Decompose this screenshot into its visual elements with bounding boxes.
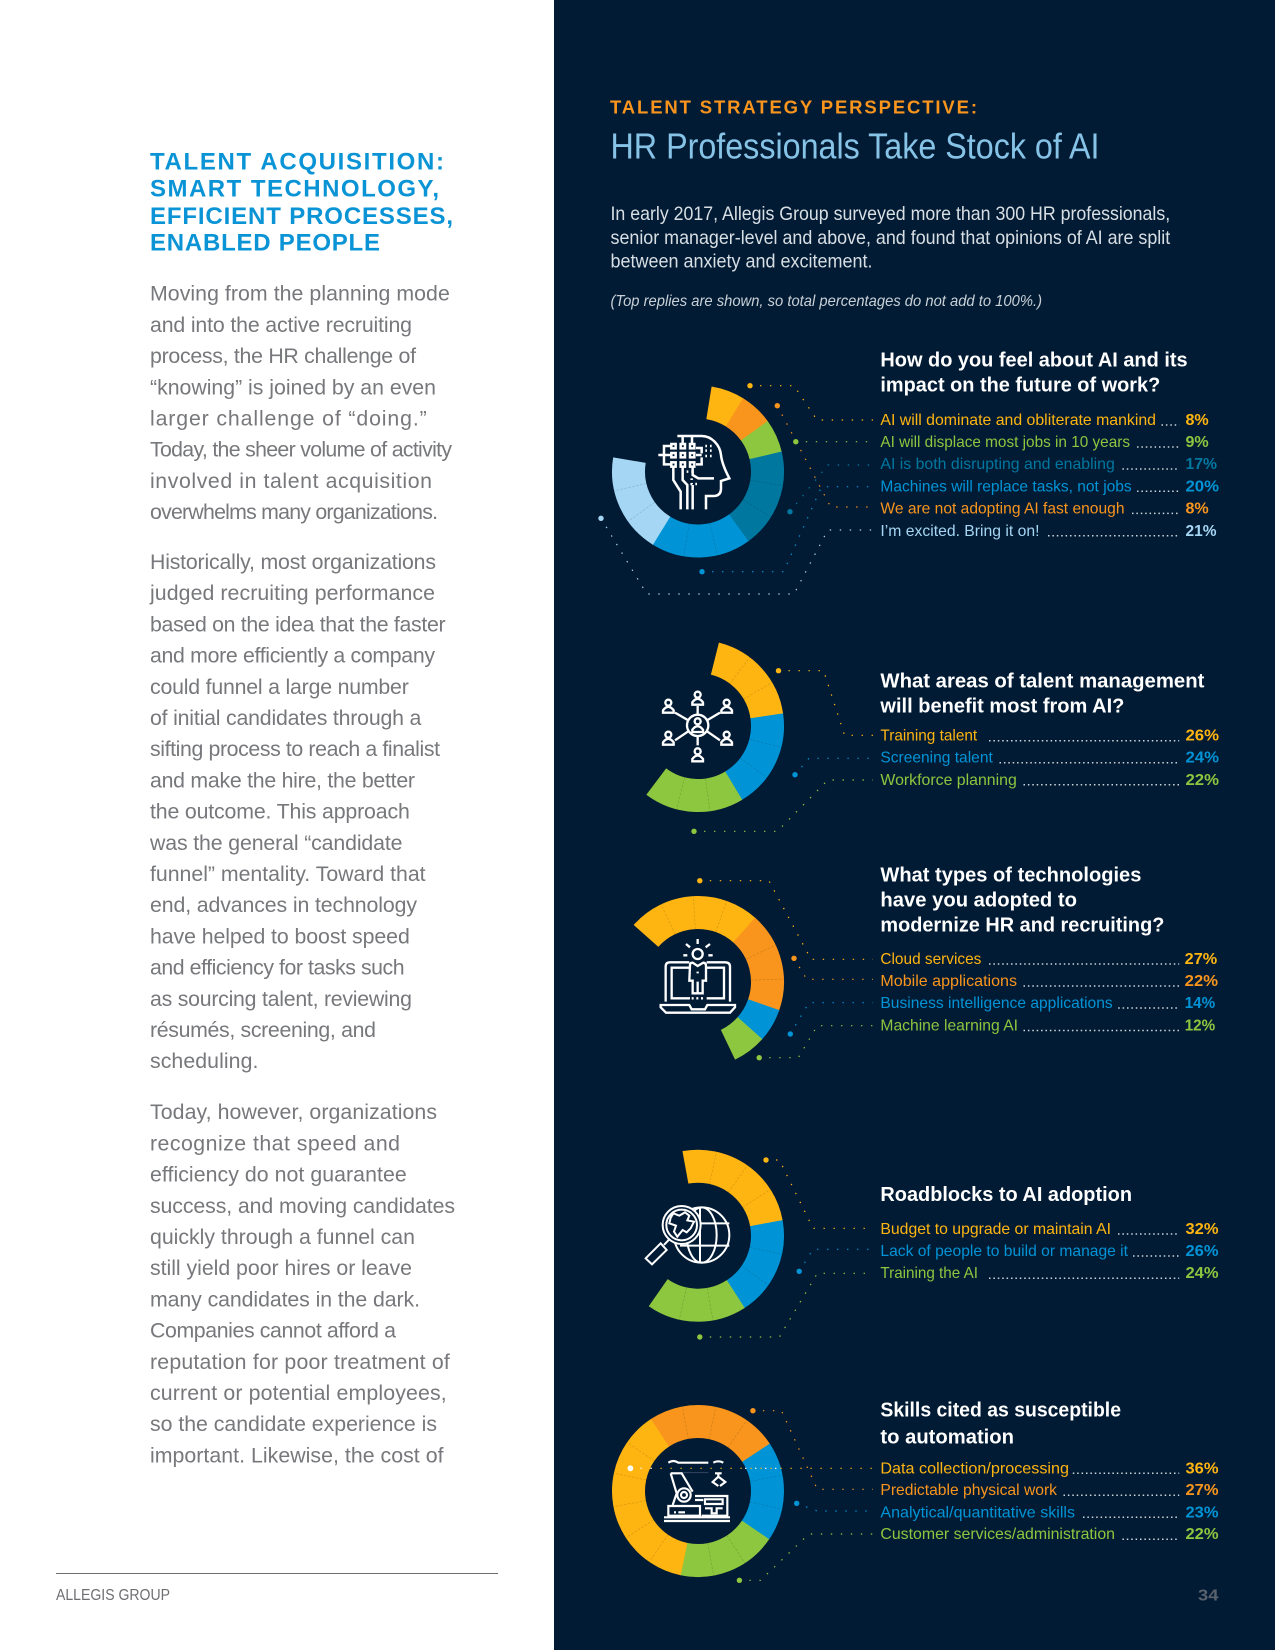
- text block: paragraph one: and into the active recruiting: [150, 313, 412, 337]
- section 1: feelings about AI: [598, 350, 1219, 594]
- answer rows 3: Business intelligence applications: [880, 995, 1113, 1012]
- text block: paragraph two: Historically, most organizations: [150, 550, 436, 574]
- connector lines and dots: [691, 668, 873, 834]
- question heading 2: [879, 670, 1205, 718]
- icon: robot arm machine: [664, 1461, 730, 1521]
- text block: paragraph three: Today, however, organizations: [150, 1100, 437, 1124]
- question heading 2: will benefit most from AI?: [879, 696, 1124, 718]
- answer rows 5: Data collection/processing: [880, 1460, 1069, 1477]
- text block: paragraph two: based on the idea that the faster: [150, 612, 446, 636]
- footer: page number: 34: [1198, 1588, 1219, 1605]
- answer rows 3: Mobile applications: [880, 973, 1017, 990]
- answer rows 5: 22%: [1186, 1526, 1218, 1543]
- section 2: talent management areas: [603, 631, 1219, 834]
- answer rows 4: 24%: [1186, 1265, 1218, 1282]
- text block: paragraph three: many candidates in the dark.: [150, 1287, 420, 1311]
- text block: paragraph two: judged recruiting performance: [149, 581, 435, 605]
- intro text: between anxiety and excitement.: [610, 250, 872, 272]
- text block: paragraph two: résumés, screening, and: [150, 1018, 376, 1042]
- answer rows 5: Predictable physical work: [880, 1482, 1058, 1499]
- answer rows 4: 26%: [1186, 1243, 1218, 1260]
- panel: dark right page background: [554, 0, 1275, 1650]
- answer rows 5: [880, 1460, 1218, 1543]
- answer rows 1: AI will dominate and obliterate mankind: [880, 412, 1156, 429]
- answer rows 1: 9%: [1186, 434, 1209, 451]
- question heading 3: have you adopted to: [880, 890, 1077, 912]
- answer rows 2: Training talent: [880, 728, 978, 745]
- text block: paragraph three: important. Likewise, the cost of: [150, 1443, 444, 1467]
- text block: paragraph one: “knowing” is joined by an even: [150, 375, 436, 399]
- text block: paragraph three: Companies cannot afford a: [150, 1319, 396, 1343]
- text block: paragraph two: could funnel a large number: [150, 675, 409, 699]
- kicker heading: TALENT STRATEGY PERSPECTIVE:: [610, 96, 977, 117]
- text block: paragraph one: Today, the sheer volume of activity: [150, 438, 452, 462]
- question heading 3: modernize HR and recruiting?: [880, 915, 1164, 937]
- text block: paragraph one: overwhelms many organizations.: [150, 500, 438, 524]
- answer rows 4: Training the AI: [880, 1265, 978, 1282]
- icon: globe and magnifier: [646, 1206, 729, 1264]
- answer rows 2: 24%: [1186, 750, 1219, 767]
- answer rows 1: AI is both disrupting and enabling: [880, 456, 1115, 473]
- main title: HR Professionals Take Stock of AI: [610, 125, 1100, 166]
- text block: paragraph two: [149, 550, 446, 1073]
- donut chart 1: [601, 375, 795, 568]
- answer rows 2: Screening talent: [880, 750, 993, 767]
- answer rows 1: 20%: [1186, 478, 1219, 495]
- answer rows 1: I’m excited. Bring it on!: [880, 523, 1040, 540]
- text block: paragraph one: larger challenge of “doing.”: [150, 406, 427, 430]
- text block: paragraph three: [150, 1100, 455, 1467]
- text block: paragraph one: [150, 282, 452, 524]
- question heading 4: Roadblocks to AI adoption: [880, 1184, 1132, 1206]
- answer rows 1: AI will displace most jobs in 10 years: [880, 434, 1130, 451]
- panel: white left page background: [0, 0, 554, 1650]
- answer rows 4: [880, 1221, 1218, 1282]
- icon: person in laptop: [661, 939, 735, 1013]
- text block: paragraph two: was the general “candidate: [149, 831, 402, 855]
- text block: paragraph one: process, the HR challenge of: [150, 344, 416, 368]
- text block: paragraph two: of initial candidates through a: [150, 706, 422, 730]
- answer rows 3: 22%: [1185, 973, 1218, 990]
- answer rows 4: Lack of people to build or manage it: [880, 1243, 1129, 1260]
- icon: people network: [663, 692, 732, 761]
- question heading 5: [880, 1400, 1121, 1448]
- answer rows 5: 36%: [1186, 1460, 1218, 1477]
- question heading 1: [880, 350, 1188, 397]
- question heading 1: How do you feel about AI and its: [880, 350, 1188, 372]
- answer rows 1: 17%: [1186, 456, 1217, 473]
- intro text: senior manager-level and above, and found that opinions of AI are split: [610, 227, 1171, 249]
- question heading 3: [880, 865, 1164, 937]
- text block: paragraph two: funnel” mentality. Toward that: [150, 862, 426, 886]
- icon: AI head with circuit: [658, 436, 729, 509]
- connector lines and dots: [628, 1408, 873, 1583]
- answer rows 5: 27%: [1186, 1482, 1218, 1499]
- left column heading: SMART TECHNOLOGY,: [150, 176, 439, 203]
- answer rows 1: 8%: [1186, 412, 1209, 429]
- answer rows 3: 12%: [1185, 1018, 1215, 1034]
- answer rows 1: [880, 412, 1219, 540]
- left column heading: ENABLED PEOPLE: [150, 230, 380, 257]
- donut chart 2: [603, 631, 793, 821]
- note text: (Top replies are shown, so total percentages do not add to 100%.): [610, 293, 1042, 310]
- section 5: skills susceptible to automation: [601, 1394, 1218, 1588]
- text block: paragraph three: current or potential employees,: [150, 1381, 447, 1405]
- text block: paragraph two: end, advances in technology: [150, 893, 417, 917]
- text block: paragraph two: have helped to boost speed: [150, 924, 410, 948]
- answer rows 2: 26%: [1186, 728, 1219, 745]
- question heading 5: Skills cited as susceptible: [880, 1400, 1121, 1422]
- text block: paragraph three: so the candidate experience is: [150, 1412, 437, 1436]
- text block: paragraph three: quickly through a funnel can: [150, 1225, 415, 1249]
- left column heading: EFFICIENT PROCESSES,: [150, 203, 453, 230]
- answer rows 3: Cloud services: [880, 951, 981, 968]
- connector lines and dots: [697, 1157, 873, 1340]
- answer rows 1: 8%: [1186, 500, 1209, 517]
- donut chart 4: [602, 1140, 794, 1332]
- question heading 5: to automation: [880, 1426, 1014, 1448]
- text block: paragraph two: scheduling.: [150, 1049, 258, 1073]
- text block: paragraph one: Moving from the planning mode: [150, 282, 450, 306]
- question heading 2: What areas of talent management: [880, 670, 1205, 692]
- answer rows 1: Machines will replace tasks, not jobs: [880, 478, 1132, 495]
- footer rule: [56, 1572, 498, 1574]
- answer rows 2: 22%: [1186, 772, 1219, 789]
- text block: paragraph two: and make the hire, the better: [150, 768, 415, 792]
- donut chart 5: [601, 1394, 795, 1588]
- text block: paragraph three: reputation for poor treatment of: [150, 1350, 450, 1374]
- left column heading: [150, 148, 453, 257]
- text block: paragraph two: and efficiency for tasks such: [150, 956, 405, 980]
- question heading 3: What types of technologies: [880, 865, 1141, 887]
- intro text: In early 2017, Allegis Group surveyed more than 300 HR professionals,: [610, 203, 1170, 225]
- section 4: roadblocks: [602, 1140, 1218, 1340]
- text block: paragraph three: success, and moving candidates: [150, 1194, 455, 1218]
- answer rows 4: 32%: [1186, 1221, 1218, 1238]
- text block: paragraph one: involved in talent acquisition: [150, 469, 432, 493]
- answer rows 2: Workforce planning: [880, 772, 1017, 789]
- answer rows 5: Analytical/quantitative skills: [880, 1504, 1075, 1521]
- text block: paragraph three: still yield poor hires or leave: [150, 1256, 412, 1280]
- donut chart 3: [600, 884, 796, 1080]
- answer rows 1: We are not adopting AI fast enough: [880, 500, 1124, 517]
- footer: organisation name: ALLEGIS GROUP: [56, 1587, 170, 1604]
- answer rows 4: Budget to upgrade or maintain AI: [880, 1221, 1111, 1238]
- text block: paragraph two: as sourcing talent, reviewing: [150, 987, 412, 1011]
- text block: paragraph two: sifting process to reach a finalist: [150, 737, 440, 761]
- answer rows 2: [880, 728, 1219, 789]
- answer rows 5: Customer services/administration: [880, 1526, 1115, 1543]
- answer rows 3: 27%: [1185, 951, 1217, 968]
- connector lines and dots: [697, 878, 873, 1060]
- answer rows 3: [880, 951, 1218, 1034]
- answer rows 3: Machine learning AI: [880, 1018, 1018, 1034]
- text block: paragraph three: recognize that speed and: [150, 1131, 400, 1155]
- text block: paragraph three: efficiency do not guarantee: [150, 1163, 407, 1187]
- answer rows 1: 21%: [1186, 523, 1216, 540]
- question heading 1: impact on the future of work?: [880, 375, 1160, 397]
- connector lines and dots: [598, 383, 873, 594]
- answer rows 3: 14%: [1185, 995, 1215, 1012]
- text block: paragraph two: the outcome. This approach: [150, 800, 410, 824]
- section 3: technologies adopted: [600, 865, 1218, 1080]
- text block: paragraph two: and more efficiently a company: [150, 644, 435, 668]
- left column heading: TALENT ACQUISITION:: [150, 148, 444, 175]
- answer rows 5: 23%: [1186, 1504, 1218, 1521]
- intro text: [610, 203, 1171, 272]
